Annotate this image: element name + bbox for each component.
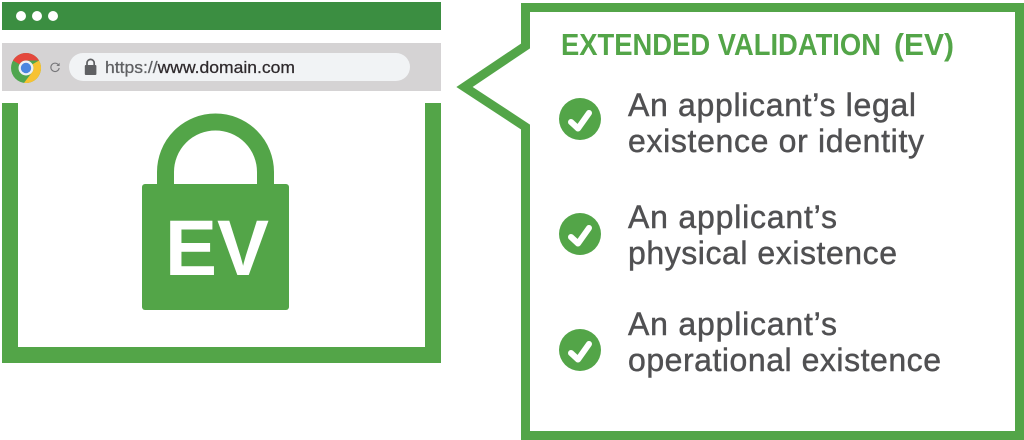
item text: existence or identity [628, 123, 924, 159]
icon: small padlock [85, 59, 96, 75]
icon: chrome logo [11, 53, 41, 83]
icon: check [559, 98, 601, 140]
icon: check [559, 329, 601, 371]
heading: (EV) [894, 27, 954, 62]
heading: EXTENDED VALIDATION [561, 27, 881, 62]
padlock label: EV [165, 203, 269, 292]
item text: An applicant’s legal [628, 87, 916, 123]
icon: check [559, 213, 601, 255]
item: operational existence [559, 306, 941, 378]
item: legal existence [559, 87, 924, 159]
item text: physical existence [628, 235, 897, 271]
url text: https://www.domain.com [105, 59, 295, 77]
browser window frame [2, 103, 441, 363]
item text: operational existence [628, 342, 941, 378]
icon: reload [51, 63, 60, 72]
item text: An applicant’s [628, 199, 837, 235]
panel: callout [464, 8, 1020, 436]
icon: EV padlock [142, 122, 289, 310]
browser address bar [2, 43, 441, 91]
item: physical existence [559, 199, 897, 271]
item text: An applicant’s [628, 306, 837, 342]
url pill [69, 53, 410, 81]
browser title bar [2, 2, 441, 30]
